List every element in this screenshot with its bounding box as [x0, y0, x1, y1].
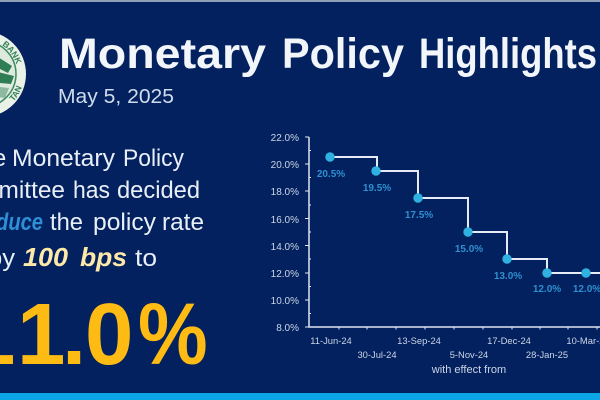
y axis labels: 14.0%	[271, 242, 299, 253]
data points	[325, 152, 591, 278]
text block: decision statement: to	[135, 245, 157, 272]
y axis labels	[271, 133, 299, 334]
y axis labels: 10.0%	[271, 296, 299, 307]
title: Monetary	[59, 30, 266, 78]
text block: decision statement	[0, 145, 204, 272]
x axis labels: 11-Jun-24	[310, 335, 352, 346]
x axis labels	[310, 335, 600, 376]
policy rate value: .	[62, 286, 86, 383]
text block: decision statement: Policy	[123, 145, 185, 172]
data labels: 13.0%	[494, 271, 522, 282]
bottom band	[0, 393, 600, 400]
chart: policy rate step line	[271, 133, 600, 376]
y axis labels: 20.0%	[271, 160, 299, 171]
data labels: 20.5%	[317, 169, 345, 180]
policy rate value: 1	[17, 286, 65, 383]
data labels: 19.5%	[363, 183, 391, 194]
policy rate value: %	[138, 285, 208, 383]
x axis labels: 5-Nov-24	[450, 349, 488, 360]
text block: decision statement: 100	[23, 242, 69, 272]
x axis labels: 13-Sep-24	[397, 335, 441, 346]
text block: decision statement: rate	[162, 209, 204, 236]
text block: decision statement: decided	[117, 177, 200, 204]
data labels	[317, 169, 600, 295]
icon: State Bank of Pakistan seal: TAN	[9, 86, 22, 100]
icon: State Bank of Pakistan seal: BANK	[2, 40, 22, 64]
y axis labels: 22.0%	[271, 133, 299, 144]
title	[59, 30, 597, 78]
text block: decision statement: bps	[80, 242, 127, 272]
step line	[330, 157, 600, 273]
y axis labels: 18.0%	[271, 187, 299, 198]
data labels: 17.5%	[405, 210, 433, 221]
text block: decision statement: has	[73, 177, 110, 204]
x axis labels: with effect from	[431, 364, 506, 376]
y axis labels: 12.0%	[271, 269, 299, 280]
icon: State Bank of Pakistan seal	[0, 34, 26, 114]
x axis labels: 28-Jan-25	[526, 349, 568, 360]
text block: decision statement: Monetary	[12, 145, 116, 172]
title: Policy	[282, 30, 404, 78]
text block: decision statement: the	[50, 209, 83, 236]
policy rate value	[0, 285, 208, 383]
x axis labels: 30-Jul-24	[357, 349, 397, 360]
data labels: 15.0%	[455, 244, 483, 255]
policy rate value: 0	[85, 286, 133, 383]
date: May 5, 2025	[58, 85, 174, 108]
y axis labels: 16.0%	[271, 215, 299, 226]
y axis labels: 8.0%	[276, 323, 299, 334]
data labels: 12.0%	[533, 284, 561, 295]
x axis labels: 17-Dec-24	[487, 335, 531, 346]
text block: decision statement: policy	[93, 209, 157, 236]
axes	[305, 137, 600, 330]
